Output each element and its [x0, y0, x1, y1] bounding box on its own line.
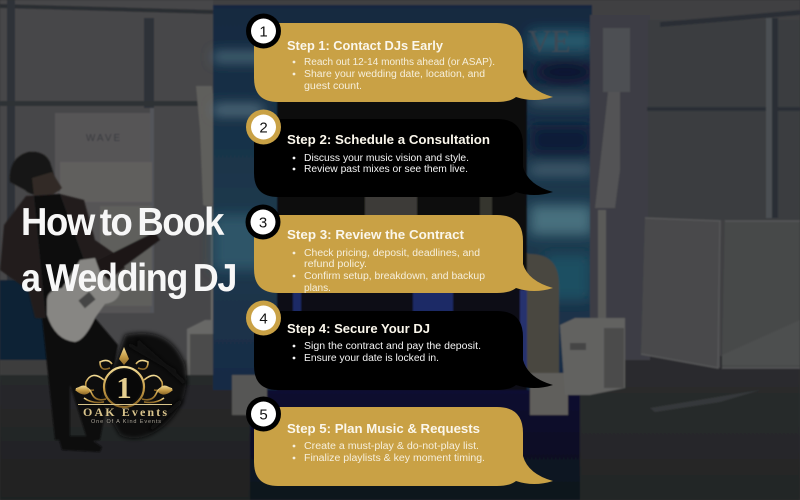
step 3 heading: Step 3: Review the Contract	[287, 228, 465, 242]
step 4 card	[246, 300, 553, 390]
step 2 heading: Step 2: Schedule a Consultation	[287, 133, 490, 147]
speech bubble 3	[254, 215, 553, 293]
speech bubble 2	[254, 119, 553, 197]
step 5 card	[246, 396, 553, 486]
step 5 bullets	[293, 441, 485, 464]
title	[21, 201, 236, 300]
step 1 heading: Step 1: Contact DJs Early	[287, 39, 443, 53]
left window wall: WAVE	[86, 133, 122, 144]
step 1 bullets: guest count.	[304, 81, 362, 92]
logo: 1 OAK Events: One Of A Kind Events	[91, 419, 161, 425]
step 1 bullets: Share your wedding date, location, and	[304, 69, 485, 80]
number badge 3	[246, 204, 280, 240]
step 2 bullets: Review past mixes or see them live.	[304, 164, 468, 175]
step 1 bullets: Reach out 12-14 months ahead (or ASAP).	[304, 57, 495, 68]
backdrop wall with blue waves	[213, 5, 595, 390]
step 3 card	[246, 204, 553, 294]
left window wall	[0, 0, 213, 376]
step 2 card	[246, 110, 553, 197]
crest ornament	[76, 360, 172, 407]
logo: 1 OAK Events: 1	[116, 370, 132, 405]
number badge 2: 2	[259, 120, 268, 136]
title: How to Book	[21, 201, 225, 244]
number badge 5	[246, 396, 281, 432]
number badge 1: 1	[259, 24, 268, 40]
number badge 4: 4	[259, 310, 268, 328]
step 1 card	[246, 14, 553, 102]
logo: 1 OAK Events: OAK Events	[83, 405, 167, 419]
speech bubble 1	[254, 23, 553, 102]
backdrop wall with blue waves: VE	[528, 23, 571, 59]
step 3 bullets	[293, 248, 485, 294]
step 3 bullets: refund policy.	[304, 259, 367, 270]
centre black panel and DJ table	[232, 70, 568, 415]
step 3 bullets: Check pricing, deposit, deadlines, and	[304, 248, 480, 259]
step 2 bullets: Discuss your music vision and style.	[304, 153, 469, 164]
floor	[0, 375, 260, 500]
left column speaker	[187, 86, 254, 402]
step 5 bullets: Finalize playlists & key moment timing.	[304, 453, 485, 464]
right wall, speaker and windows	[560, 10, 800, 412]
step 1 bullets	[293, 57, 495, 92]
number badge 1	[246, 14, 281, 48]
number badge 3: 3	[259, 214, 267, 232]
step 3 bullets: Confirm setup, breakdown, and backup	[304, 271, 485, 282]
step 2 bullets	[293, 153, 469, 175]
step 3 bullets: plans.	[304, 283, 331, 294]
number badge 5: 5	[259, 406, 268, 424]
number badge 4	[246, 300, 281, 336]
step 4 bullets: Sign the contract and pay the deposit.	[304, 341, 481, 352]
step 4 bullets: Ensure your date is locked in.	[304, 353, 439, 364]
step 4 heading: Step 4: Secure Your DJ	[287, 322, 430, 336]
number badge 2	[246, 110, 281, 144]
logo: 1 OAK Events	[75, 333, 186, 438]
title: a Wedding DJ	[21, 257, 236, 300]
speech bubble 4	[254, 311, 553, 390]
step 4 bullets	[293, 341, 481, 364]
musician with guitar	[0, 152, 160, 452]
speech bubble 5	[254, 407, 553, 486]
step 5 bullets: Create a must-play & do-not-play list.	[304, 441, 479, 452]
step 5 heading: Step 5: Plan Music & Requests	[287, 422, 480, 436]
